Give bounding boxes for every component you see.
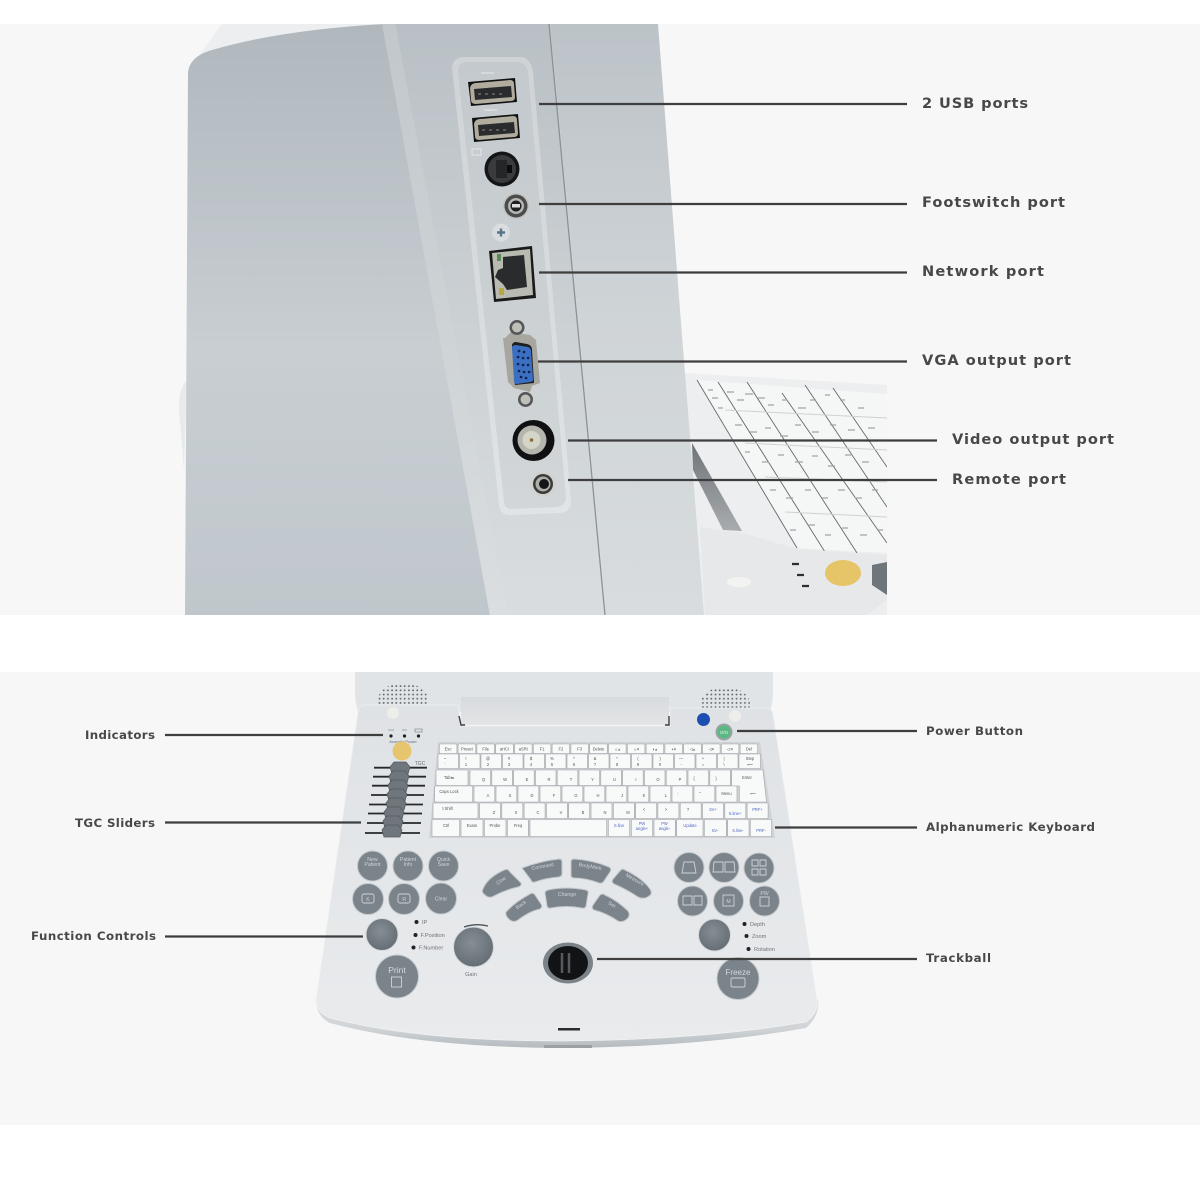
keyboard row 5: N bbox=[604, 810, 607, 815]
soft keys bbox=[482, 859, 651, 922]
keyboard row 2: 9 bbox=[637, 762, 640, 767]
Print button: Print bbox=[388, 965, 406, 975]
right face bbox=[550, 24, 704, 615]
keyboard row 2: ) bbox=[659, 756, 661, 761]
keyboard row 4: Caps Lock bbox=[439, 789, 460, 794]
keyboard row 1: F2 bbox=[559, 746, 564, 752]
round pad left bbox=[387, 707, 399, 719]
keyboard row 2: ( bbox=[637, 756, 639, 761]
keyboard row 1: ◐▾ bbox=[671, 746, 676, 752]
keyboard row 6: angle- bbox=[659, 826, 671, 831]
keyboard row 1: Delete bbox=[593, 746, 605, 752]
left button: flip right bbox=[388, 884, 420, 914]
keyboard row 4: : bbox=[677, 791, 679, 796]
key: Comment bbox=[522, 859, 562, 882]
keyboard row 6: Update bbox=[683, 823, 697, 828]
key: Cine bbox=[482, 869, 521, 897]
keyboard row 2: 1 bbox=[465, 762, 468, 767]
keyboard row 2: — bbox=[679, 756, 684, 761]
keyboard slot bbox=[692, 443, 742, 531]
key: Cine: Cine bbox=[495, 876, 508, 887]
keyboard row 4: H bbox=[597, 793, 600, 798]
indicator oval bbox=[727, 577, 751, 587]
grey slider knob bbox=[872, 562, 887, 595]
keyboard row 2: \ bbox=[723, 762, 725, 767]
keyboard row 3: W bbox=[503, 777, 507, 782]
keyboard row 6: Probe bbox=[490, 823, 501, 828]
keyboard row 2: & bbox=[594, 756, 597, 761]
keyboard row 6: PW bbox=[639, 821, 645, 826]
left button: Patient Info: Patient bbox=[400, 857, 417, 863]
acoustic power knob bbox=[392, 742, 412, 760]
seam line bbox=[549, 24, 605, 615]
network port bbox=[489, 246, 536, 302]
keyboard row 6: Ctrl bbox=[443, 823, 449, 828]
upper lighter bevel bbox=[200, 24, 378, 54]
callout: Video output port: Video output port bbox=[952, 431, 1114, 448]
callout: Remote port: Remote port bbox=[952, 471, 1066, 488]
VGA port bbox=[503, 320, 540, 407]
keyboard row 1: ◁✕ bbox=[727, 746, 733, 752]
callout: VGA output port: VGA output port bbox=[922, 352, 1071, 369]
mode button: B bbox=[674, 852, 704, 882]
bottom slot bbox=[558, 1028, 580, 1030]
left button: flip left bbox=[352, 884, 384, 914]
key: Measure bbox=[612, 869, 651, 898]
keyboard row 3: { bbox=[693, 776, 695, 781]
keyboard row 2: ` bbox=[444, 762, 446, 767]
keyboard row 6: angle+ bbox=[636, 826, 649, 831]
keyboard row 2: * bbox=[616, 756, 618, 761]
TGC label: TGC bbox=[415, 761, 426, 767]
right knob labels: Depth bbox=[750, 922, 765, 928]
USB port upper bbox=[468, 78, 517, 106]
callout: Power Button: Power Button bbox=[926, 724, 1023, 738]
keyboard row 3 bbox=[436, 770, 766, 802]
key: Change bbox=[545, 888, 588, 908]
callout: Function Controls: Function Controls bbox=[31, 929, 156, 943]
mode button: PW: PW bbox=[760, 891, 769, 897]
keyboard row 2: 8 bbox=[616, 762, 619, 767]
speaker grille right bbox=[700, 687, 750, 721]
keyboard row 2: % bbox=[550, 756, 554, 761]
screw bbox=[492, 224, 510, 242]
keyboard row 2: Step bbox=[746, 756, 755, 761]
callout: Network port: Network port bbox=[922, 263, 1044, 280]
lid bbox=[355, 672, 773, 712]
console surface bbox=[316, 705, 817, 1041]
round pad right bbox=[729, 710, 741, 722]
gain knob: Gain bbox=[465, 972, 477, 978]
left button: Clear: Clear bbox=[435, 896, 447, 902]
keyboard row 4: A bbox=[487, 793, 490, 798]
keyboard row 4: G bbox=[574, 793, 578, 798]
power button: O/G bbox=[720, 730, 729, 735]
trackball bbox=[543, 942, 593, 984]
Freeze button bbox=[717, 958, 759, 1000]
VGA screw top bbox=[510, 320, 524, 335]
keyboard row 1: ◁▴ bbox=[690, 746, 695, 752]
power button bbox=[716, 724, 732, 740]
keyboard row 2 bbox=[438, 754, 760, 768]
keyboard row 5: C bbox=[537, 810, 540, 815]
keyboard row 3: E bbox=[526, 777, 529, 782]
strip between faces bbox=[382, 24, 508, 615]
device photo: rear port panel bbox=[179, 24, 887, 615]
right knob bbox=[698, 919, 730, 951]
keyboard row 1: ☼▾ bbox=[633, 746, 639, 752]
yellow knob bbox=[825, 560, 861, 586]
keyboard row 4: S bbox=[509, 793, 512, 798]
keyboard row 2: 4 bbox=[530, 762, 533, 767]
callout: Trackball: Trackball bbox=[926, 951, 991, 965]
keyboard row 3: Tab⇆ bbox=[444, 775, 455, 780]
keyboard row 1: aSRI bbox=[519, 746, 528, 752]
key: Set: Set bbox=[607, 901, 617, 910]
left side face bbox=[185, 24, 490, 615]
background band: control panel bbox=[0, 672, 1200, 1125]
key: Comment: Comment bbox=[531, 862, 555, 872]
keyboard row 2: 3 bbox=[508, 762, 511, 767]
connector plate bbox=[452, 57, 571, 515]
left button: Quick Save: Save bbox=[438, 862, 450, 868]
indicator lights: Acoustic Power bbox=[389, 739, 417, 744]
keyboard row 1 bbox=[439, 744, 758, 754]
keyboard row 3: P bbox=[679, 777, 682, 782]
callout: TGC Sliders: TGC Sliders bbox=[75, 816, 155, 830]
keyboard row 5: PRF+ bbox=[752, 807, 763, 812]
bottom latch bbox=[544, 1045, 592, 1048]
keyboard row 6 bbox=[432, 820, 772, 836]
key: Back bbox=[506, 893, 542, 922]
device photo: control panel bbox=[316, 672, 818, 1048]
brand logo bbox=[697, 713, 710, 726]
keyboard row 5 bbox=[433, 803, 768, 818]
keyboard row 2: ! bbox=[465, 756, 467, 761]
right knob labels: Zoom bbox=[752, 934, 767, 940]
mode button: M: M bbox=[726, 899, 731, 905]
key: Set bbox=[592, 894, 629, 922]
keyboard row 5: Z bbox=[493, 810, 496, 815]
gain knob bbox=[454, 925, 494, 978]
keyboard row 6: S.line bbox=[614, 823, 625, 828]
USB port lower bbox=[472, 114, 520, 142]
keyboard row 2: 7 bbox=[594, 762, 597, 767]
left button: Quick Save: Quick bbox=[437, 857, 451, 863]
mode button: B/M bbox=[678, 886, 708, 916]
mode button: 2B bbox=[709, 852, 739, 882]
faint port symbols bbox=[472, 72, 497, 156]
mode button: M bbox=[714, 886, 744, 916]
callout: Footswitch port: Footswitch port bbox=[922, 194, 1065, 211]
keyboard row 1: F3 bbox=[577, 746, 583, 752]
key: Back: Back bbox=[515, 899, 528, 911]
left button: New Patient: New bbox=[367, 857, 378, 863]
keyboard row 4: J bbox=[621, 793, 623, 798]
keyboard row 2: @ bbox=[486, 756, 490, 761]
function labels: F.Position bbox=[420, 933, 445, 939]
function control knob bbox=[366, 918, 398, 950]
keyboard row 5: > bbox=[665, 807, 668, 812]
keyboard row 2: | bbox=[723, 756, 725, 761]
keyboard row 5: M bbox=[626, 810, 630, 815]
keyboard row 5: S.line+ bbox=[729, 811, 742, 816]
keyboard row 4: K bbox=[643, 793, 646, 798]
keyboard row 3: O bbox=[656, 777, 660, 782]
key: BodyMark bbox=[571, 859, 611, 883]
Freeze button: Freeze bbox=[726, 968, 751, 977]
keyboard row 4: D bbox=[531, 793, 534, 798]
callout: Alphanumeric Keyboard: Alphanumeric Keyboard bbox=[926, 820, 1095, 834]
keyboard row 3: } bbox=[715, 776, 717, 781]
keyboard console seen from the side bbox=[685, 373, 887, 615]
left button: New Patient bbox=[358, 851, 388, 881]
callout: 2 USB ports: 2 USB ports bbox=[922, 95, 1028, 112]
console lower lip bbox=[316, 1000, 818, 1048]
keyboard row 5: ? bbox=[687, 807, 690, 812]
video BNC port bbox=[512, 420, 554, 461]
keyboard row 3: T bbox=[570, 777, 573, 782]
callout: Indicators: Indicators bbox=[85, 728, 155, 742]
keyboard row 6: S.line- bbox=[732, 828, 744, 833]
function labels bbox=[412, 920, 445, 952]
keyboard row 2: - bbox=[680, 762, 682, 767]
keyboard row 4: Menu bbox=[721, 791, 732, 796]
keyboard row 5: X bbox=[515, 810, 518, 815]
TGC sliders bbox=[365, 762, 427, 837]
keyboard row 2: ^ bbox=[573, 756, 575, 761]
keyboard row 1: F1 bbox=[540, 746, 545, 752]
keyboard row 4: L bbox=[665, 793, 668, 798]
background band: rear panel bbox=[0, 24, 1200, 615]
mode button: 4B bbox=[744, 853, 774, 883]
keyboard row 1: File bbox=[482, 746, 490, 752]
left button: Patient Info: Info bbox=[404, 862, 412, 868]
keyboard row 4: F bbox=[553, 793, 556, 798]
keyboard row 3: I bbox=[635, 777, 637, 782]
keyboard row 6: Freq bbox=[514, 823, 523, 828]
left button: flip right: Я bbox=[402, 897, 406, 903]
mode button: PW bbox=[750, 886, 780, 916]
keyboard row 2: 0 bbox=[659, 762, 662, 767]
left button: flip left: K bbox=[366, 897, 370, 903]
indicator dots bbox=[792, 564, 809, 586]
function labels: IP bbox=[422, 920, 428, 926]
keyboard row 4 bbox=[435, 786, 737, 802]
right knob labels: Rotation bbox=[754, 947, 775, 953]
VGA screw bottom bbox=[518, 392, 533, 407]
key: BodyMark: BodyMark bbox=[578, 862, 603, 872]
keyboard row 3: U bbox=[613, 777, 616, 782]
keyboard row 1: ☼▴ bbox=[614, 746, 620, 752]
keyboard row 3: Y bbox=[591, 777, 594, 782]
keyboard row 1: ◁▾ bbox=[709, 746, 714, 752]
indicator lights bbox=[388, 729, 422, 744]
keyboard row 2: 5 bbox=[551, 762, 554, 767]
key: Measure: Measure bbox=[624, 872, 645, 888]
keyboard row 6: PW bbox=[661, 821, 668, 826]
keyboard row 2: = bbox=[702, 762, 705, 767]
keyboard row 2: $ bbox=[530, 756, 533, 761]
remote port bbox=[530, 472, 556, 496]
keyboard row 1: Preset bbox=[461, 746, 474, 752]
keyboard row 5: ⇧Shift bbox=[441, 806, 454, 811]
footswitch port bbox=[503, 193, 529, 219]
keyboard row 2: ⟵ bbox=[747, 762, 753, 767]
keyboard row 2: 2 bbox=[487, 762, 490, 767]
keyboard row 3: ⟵ bbox=[750, 791, 756, 796]
keyboard row 6: SV- bbox=[712, 828, 719, 833]
keyboard row 1: Esc bbox=[445, 746, 452, 752]
keyboard row 2: ~ bbox=[444, 756, 447, 761]
keyboard row 4: " bbox=[699, 791, 701, 796]
speaker grille left bbox=[378, 683, 428, 717]
keyboard row 2: 6 bbox=[573, 762, 576, 767]
keyboard row 5: V bbox=[560, 810, 563, 815]
keyboard row 3: R bbox=[548, 777, 551, 782]
keyboard row 2: + bbox=[702, 756, 705, 761]
Print button bbox=[376, 955, 418, 998]
keyboard row 5: SV+ bbox=[709, 807, 718, 812]
keyboard row 2: # bbox=[508, 756, 511, 761]
keyboard row 6: Exam bbox=[467, 823, 478, 828]
left button: Quick Save bbox=[428, 851, 458, 881]
hinge bbox=[461, 697, 669, 725]
lower console surface bbox=[824, 550, 857, 554]
right knob labels bbox=[742, 922, 775, 953]
keyboard row 3: Q bbox=[482, 777, 485, 782]
panel area next to bevel bbox=[395, 24, 606, 615]
keyboard row 1: Del bbox=[746, 746, 752, 752]
keyboard row 1: ◐▴ bbox=[653, 746, 657, 752]
PS2 port bbox=[484, 152, 520, 186]
keyboard row 1: aHCI bbox=[500, 746, 509, 752]
function labels: F.Number bbox=[419, 946, 443, 952]
keyboard row 5: B bbox=[582, 810, 585, 815]
left button: Patient Info bbox=[393, 851, 423, 881]
keyboard row 3: Enter bbox=[742, 775, 753, 780]
keyboard bbox=[429, 742, 775, 838]
left button: Clear bbox=[426, 883, 456, 914]
infographic bbox=[32, 24, 1114, 1048]
left button: New Patient: Patient bbox=[364, 862, 381, 868]
left handle edge bbox=[179, 381, 186, 466]
keyboard row 6: PRF- bbox=[756, 828, 766, 833]
keyboard row 5: < bbox=[643, 807, 646, 812]
key: Change: Change bbox=[558, 892, 576, 898]
